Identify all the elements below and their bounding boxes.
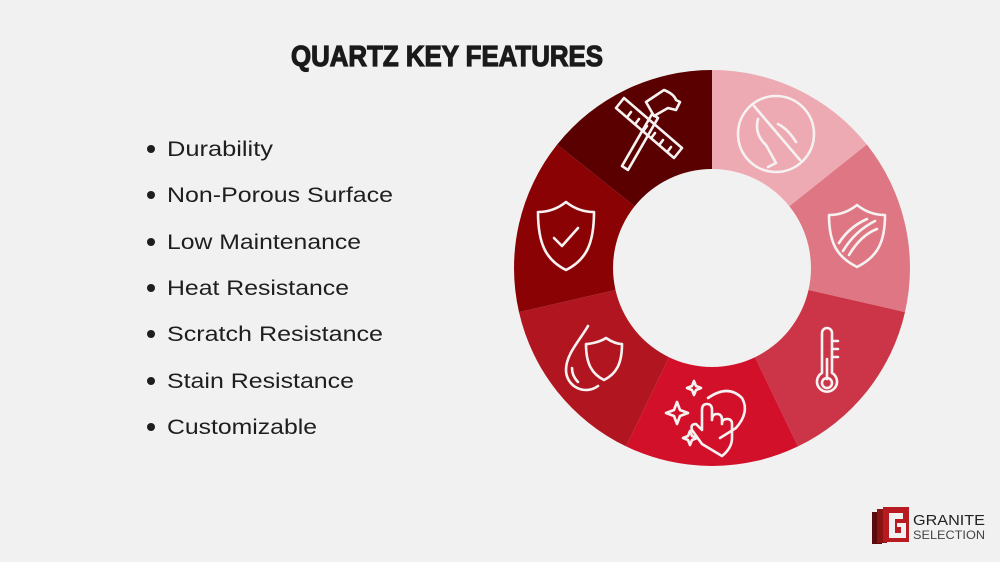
logo <box>872 507 985 544</box>
icon: check shield <box>538 202 594 270</box>
item: non-porous: Non-Porous Surface <box>167 183 393 207</box>
donut chart <box>514 70 910 466</box>
item: stain: Stain Resistance <box>167 369 354 393</box>
logo: SELECTION <box>913 528 985 542</box>
icon: hammer and ruler <box>616 90 682 170</box>
logo text: GRANITE <box>913 512 985 529</box>
item: customizable: Customizable <box>167 415 317 439</box>
feature list <box>147 137 393 439</box>
icon: no stain (crossed glass) <box>738 96 814 172</box>
title: QUARTZ KEY FEATURES <box>291 41 603 73</box>
item: low maintenance: Low Maintenance <box>167 230 361 254</box>
icon: scratch shield <box>829 205 885 267</box>
item: durability: Durability <box>167 137 273 161</box>
logo mark <box>872 507 909 544</box>
icon: thermometer <box>817 328 838 392</box>
icon: cleaning hand <box>666 381 745 456</box>
item: scratch: Scratch Resistance <box>167 322 383 346</box>
item: heat: Heat Resistance <box>167 276 349 300</box>
icon: water drop shield <box>566 326 622 390</box>
